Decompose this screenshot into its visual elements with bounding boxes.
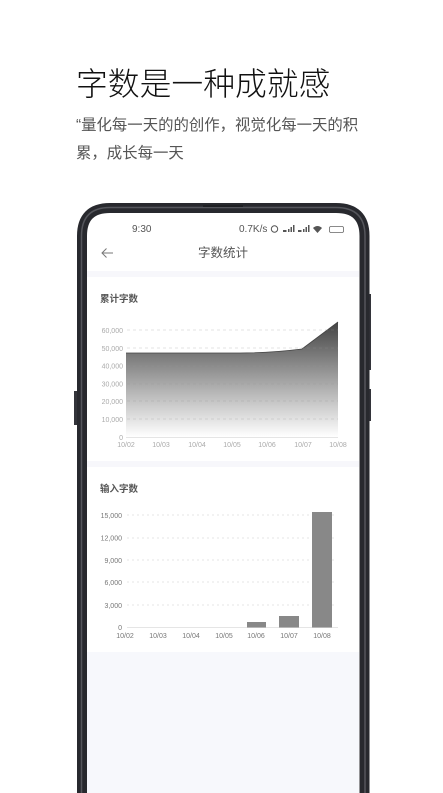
y axis labels: 40,000 (102, 364, 123, 370)
y axis labels: 30,000 (102, 382, 123, 388)
y axis labels: 0 (119, 435, 123, 442)
status bar (132, 224, 344, 235)
y axis labels: 3,000 (104, 603, 122, 610)
x axis labels: 10/05 (215, 633, 233, 640)
y axis labels: 12,000 (101, 536, 122, 542)
y axis labels: 9,000 (104, 558, 122, 565)
y axis labels: 15,000 (101, 513, 122, 520)
y axis labels: 6,000 (104, 580, 122, 587)
status bar: 0.7K/s (239, 224, 267, 235)
x axis labels: 10/05 (223, 442, 241, 449)
section band (87, 271, 359, 277)
gridlines (127, 330, 338, 419)
x axis labels: 10/07 (280, 633, 298, 640)
area chart (126, 322, 338, 437)
x axis labels: 10/03 (152, 442, 170, 449)
subtitle text (76, 116, 358, 162)
x axis labels: 10/08 (329, 442, 347, 449)
y axis labels: 20,000 (102, 399, 123, 406)
y axis labels: 0 (118, 625, 122, 632)
x axis labels: 10/06 (258, 442, 276, 449)
area line (126, 322, 338, 353)
title: 字数是一种成就感 (76, 66, 330, 102)
x axis labels: 10/04 (188, 442, 206, 449)
x axis labels: 10/04 (182, 633, 200, 640)
gridlines (127, 515, 336, 605)
x axis labels (116, 633, 331, 640)
y axis labels: 50,000 (102, 346, 123, 353)
icon: wifi (313, 226, 322, 233)
subtitle text: 累，成长每一天 (76, 145, 184, 162)
panel: cumulative word count chart (100, 293, 347, 449)
section band (87, 461, 359, 467)
panel: input word count chart (100, 483, 338, 640)
y axis labels (101, 513, 122, 632)
status bar: 9:30 (132, 224, 152, 235)
icon: alarm (271, 226, 278, 232)
x axis labels: 10/07 (294, 442, 312, 449)
icon: signal (283, 225, 310, 232)
y axis labels (102, 328, 123, 442)
icon: side buttons (74, 294, 371, 425)
chart heading: 累计字数 (100, 293, 139, 305)
icon: battery (330, 226, 344, 232)
x axis labels: 10/02 (117, 442, 135, 449)
x axis labels: 10/02 (116, 633, 134, 640)
bar chart (247, 512, 332, 628)
x axis labels (117, 442, 347, 449)
x axis labels: 10/06 (247, 633, 265, 640)
icon: back arrow (102, 248, 113, 258)
y axis labels: 10,000 (102, 417, 123, 424)
x axis labels: 10/03 (149, 633, 167, 640)
chart heading: 输入字数 (100, 483, 139, 495)
phone frame (82, 205, 365, 793)
bottom empty area (87, 652, 359, 793)
x axis labels: 10/08 (313, 633, 331, 640)
subtitle text: “量化每一天的的创作，视觉化每一天的积 (76, 117, 358, 134)
screen title: 字数统计 (198, 245, 248, 260)
y axis labels: 60,000 (102, 328, 123, 335)
